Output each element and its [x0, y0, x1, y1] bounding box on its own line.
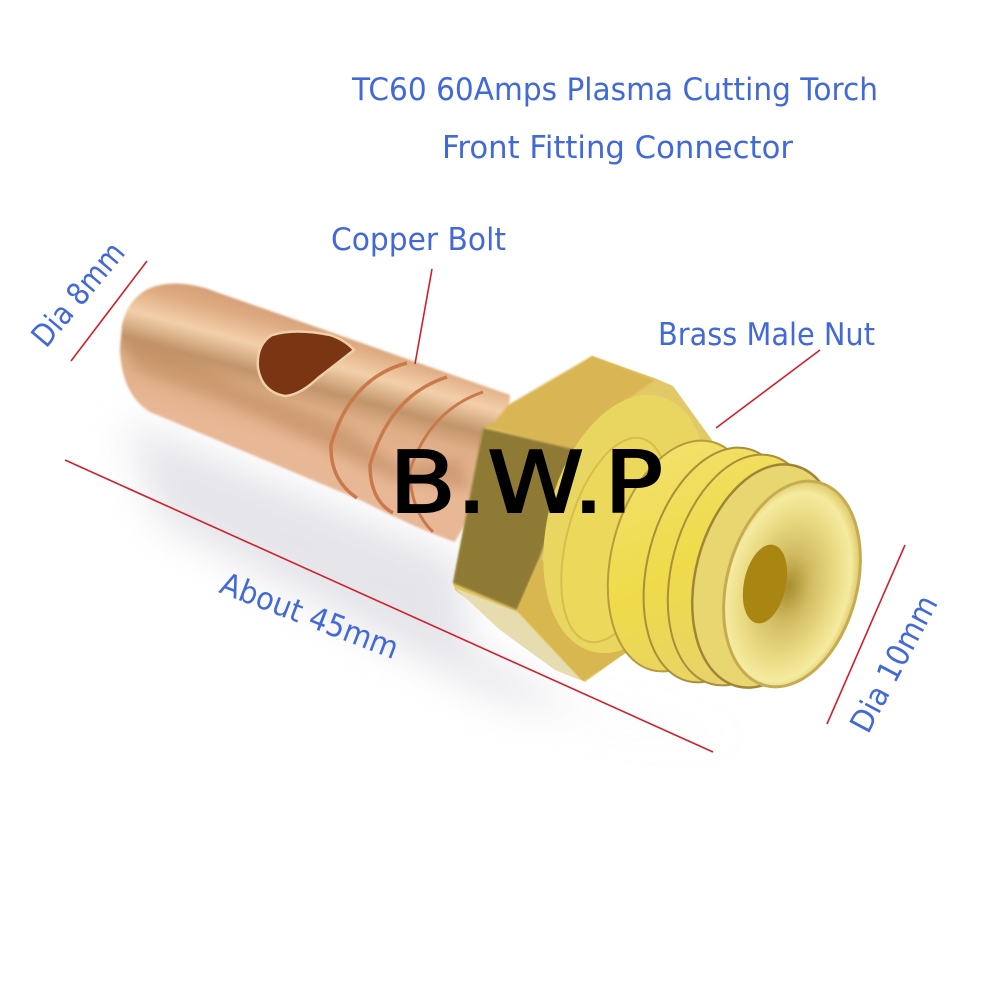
copper cylinder body — [120, 284, 510, 542]
front face cone — [702, 466, 882, 702]
brass thread — [584, 424, 882, 704]
nut outline base — [453, 356, 712, 682]
dimension: dia 8mm: Dia 8mm — [25, 235, 132, 354]
bottom hex face — [455, 588, 582, 681]
dark shaded band — [124, 340, 470, 490]
groove one — [331, 363, 407, 498]
label: copper bolt — [331, 222, 506, 364]
dark hex face — [453, 428, 577, 610]
bore hole — [736, 541, 794, 627]
copper bolt — [120, 284, 510, 542]
thread ring four — [669, 448, 863, 704]
thread ring one — [584, 424, 780, 688]
title line one: TC60 60Amps Plasma Cutting Torch — [351, 72, 878, 108]
groove two — [370, 377, 447, 513]
title — [351, 72, 878, 166]
inner collar — [541, 426, 689, 654]
groove three — [410, 392, 483, 532]
dimension: dia 10mm — [827, 545, 945, 739]
brass nut — [453, 356, 736, 682]
side hole — [258, 332, 354, 396]
lower hex facet — [517, 557, 630, 681]
label: brass male nut: Brass Male Nut — [658, 317, 875, 353]
thread ring three — [644, 438, 840, 702]
title line two: Front Fitting Connector — [442, 130, 793, 166]
dimension: dia 10mm: Dia 10mm — [843, 589, 945, 739]
label: brass male nut — [658, 317, 875, 428]
front chamfer washer — [516, 376, 736, 672]
top hex face — [484, 356, 655, 450]
dimension: about 45mm: About 45mm — [215, 566, 404, 667]
dimension: about 45mm — [65, 460, 713, 752]
watermark: B.W.P — [389, 434, 663, 533]
thread ring two — [619, 431, 817, 699]
product shadow — [125, 420, 750, 740]
label: copper bolt: Copper Bolt — [331, 222, 506, 258]
